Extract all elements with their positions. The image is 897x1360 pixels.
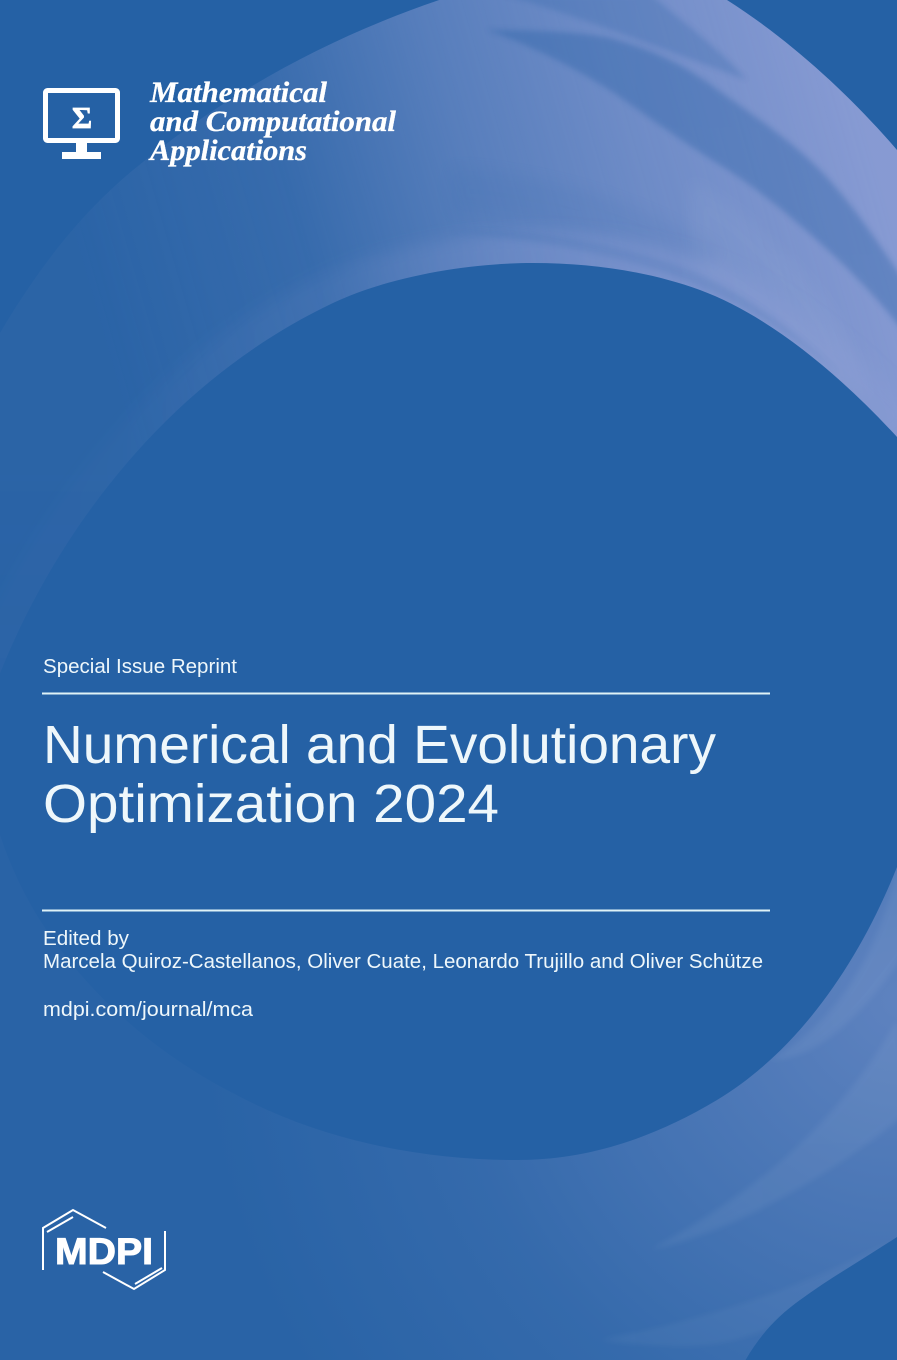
editors [43, 928, 763, 973]
title [43, 715, 716, 834]
central disc [0, 263, 897, 1160]
journal name: Applications [148, 134, 307, 167]
journal name: Mathematical [149, 76, 328, 109]
label: special issue reprint: Special Issue Reprint [43, 656, 237, 678]
journal name [148, 76, 397, 167]
swirl streaks [450, 0, 897, 1346]
title: Numerical and Evolutionary [43, 715, 716, 775]
publisher logo: MDPI: MDPI [55, 1231, 153, 1272]
inner rim band [285, 238, 700, 328]
editors: Marcela Quiroz-Castellanos, Oliver Cuate, Leonardo Trujillo and Oliver Schütze [43, 951, 763, 973]
journal url: mdpi.com/journal/mca [43, 999, 254, 1021]
editors: Edited by [43, 928, 129, 950]
title: Optimization 2024 [43, 774, 499, 834]
rule above title [42, 692, 770, 694]
journal logo: monitor icon [46, 90, 118, 159]
journal name: and Computational [150, 105, 397, 138]
publisher logo: MDPI [43, 1210, 165, 1289]
journal logo: monitor icon: Σ [72, 100, 92, 135]
rule below title [42, 910, 770, 912]
